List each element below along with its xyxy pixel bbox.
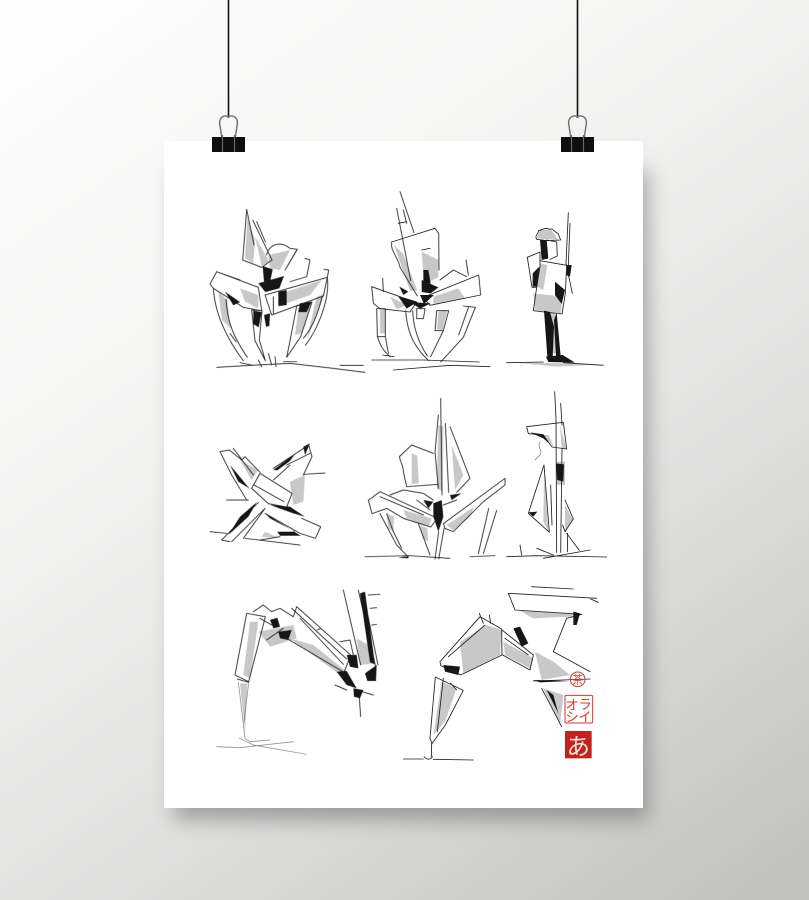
sketch: long-legged walker facing left [217, 590, 380, 754]
hanging string left [228, 0, 230, 118]
seal: square name stamp: シ [565, 710, 579, 725]
seal: solid red stamp: あ [567, 733, 590, 759]
hanging string right [576, 0, 578, 118]
seal: small round stamp [570, 672, 585, 687]
sketch: folded tower walker [507, 392, 607, 558]
sketch: four-legged walker with mast [365, 398, 505, 559]
seal: square name stamp: イ [578, 710, 592, 725]
binder clip right [561, 116, 594, 152]
binder clip left [212, 116, 245, 152]
seal: square name stamp: オ [565, 698, 579, 713]
poster drop shadow [174, 170, 648, 820]
sketch: standing soldier with rifle [507, 213, 603, 367]
sketch row 1 [210, 192, 603, 372]
poster sheet [164, 141, 643, 808]
seal: small round stamp: 茶 [572, 674, 583, 687]
sketch row 2 [210, 392, 607, 559]
sketch: spider walker two [340, 192, 490, 370]
sketch row 3 [217, 587, 598, 760]
seal: square name stamp: ラ [578, 697, 592, 712]
sketch: spider walker one [210, 209, 365, 372]
sketch: folded x-shaped walker [210, 443, 325, 545]
seal: square name stamp [565, 695, 593, 725]
sketch: walker with raised block body [403, 587, 598, 760]
